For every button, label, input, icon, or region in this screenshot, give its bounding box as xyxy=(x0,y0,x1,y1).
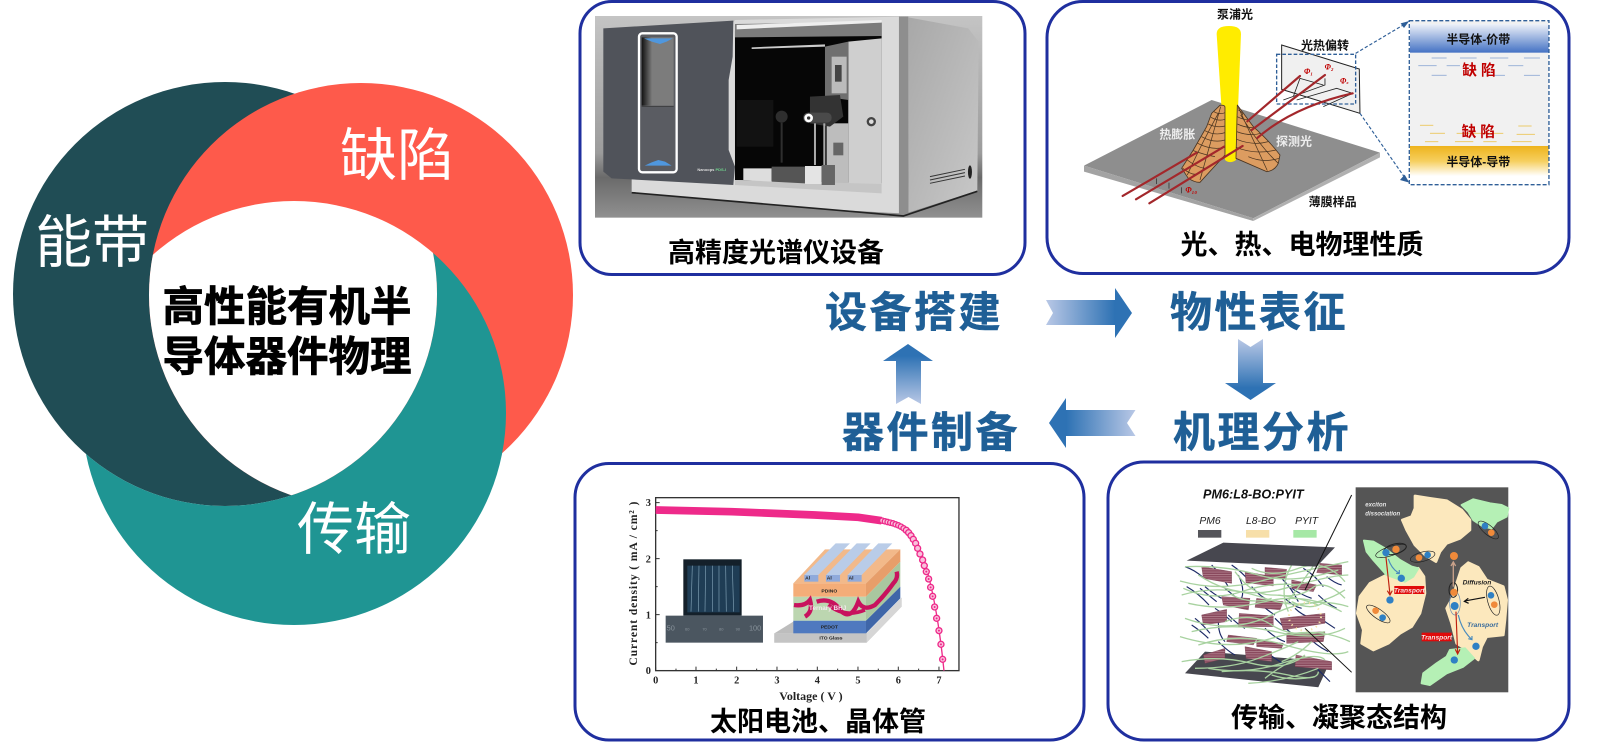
inset: device stack: PDINO xyxy=(821,589,837,595)
photothermal deflection schematic: 热膨胀 xyxy=(1159,127,1195,142)
axis tick labels xyxy=(646,498,942,687)
panel: spectrometer equipment xyxy=(580,2,1025,274)
central title: 导体器件物理 xyxy=(162,333,412,380)
arrow: down xyxy=(1225,339,1276,400)
morphology illustration: PYIT xyxy=(1295,516,1319,527)
venn diagram: three overlapping circles xyxy=(13,82,573,625)
panel: solar cells and transistors xyxy=(575,464,1084,740)
axis tick labels: 6 xyxy=(896,676,901,687)
photothermal deflection schematic: Φ₁ xyxy=(1304,67,1313,76)
photothermal deflection schematic: 泵浦光 xyxy=(1217,7,1253,22)
photothermal deflection schematic: Φ₁₀ xyxy=(1185,186,1197,195)
step: device fabrication: 器件制备 xyxy=(842,409,1020,456)
inset: device photo: 80 xyxy=(719,627,724,632)
arrow: up xyxy=(883,344,933,404)
photothermal deflection schematic: 缺 陷 xyxy=(1462,123,1495,141)
axis tick labels: 7 xyxy=(936,676,942,687)
axis tick labels: 5 xyxy=(855,676,861,687)
inset: device stack: Al xyxy=(827,576,832,582)
instrument photo xyxy=(595,16,982,218)
inset: device stack: Ternary BHJ xyxy=(809,605,847,612)
step: characterization: 物性表征 xyxy=(1170,289,1348,336)
central title: 高性能有机半 xyxy=(162,283,412,330)
morphology illustration xyxy=(1180,487,1508,692)
flow cycle xyxy=(825,288,1351,456)
morphology illustration: exciton xyxy=(1365,503,1387,509)
inset: device photo: 100 xyxy=(749,624,761,633)
photothermal deflection schematic: 薄膜样品 xyxy=(1309,194,1357,209)
axis tick labels: 0 xyxy=(653,676,658,687)
inset: device stack: Al xyxy=(805,576,811,582)
axis tick labels: 1 xyxy=(646,610,651,621)
photothermal deflection schematic: 半导体-导带 xyxy=(1446,154,1510,169)
label: energy band: 能带 xyxy=(35,211,149,275)
morphology illustration: Diffusion xyxy=(1463,580,1491,587)
J-V chart: Current density ( mA / cm² ) xyxy=(627,502,640,666)
step: equipment: 设备搭建 xyxy=(825,289,1003,336)
panel title: 传输、凝聚态结构 xyxy=(1231,703,1447,733)
axis tick labels: 1 xyxy=(693,676,699,687)
instrument photo: Nanoops PDS-I xyxy=(697,167,726,172)
panel title: 高精度光谱仪设备 xyxy=(668,238,884,268)
photothermal deflection schematic: Φₓ xyxy=(1340,76,1349,85)
photothermal deflection schematic: 半导体-价带 xyxy=(1446,31,1510,46)
inset: device stack: PEDOT xyxy=(821,625,838,631)
inset: device photo: 60 xyxy=(685,627,690,632)
central title xyxy=(162,283,412,380)
inset: device photo: 50 xyxy=(667,624,675,633)
inset: device photo: 90 xyxy=(736,627,741,632)
axis tick labels: 0 xyxy=(646,666,651,677)
inset: device stack: ITO Glass xyxy=(819,636,843,642)
axis tick labels: 4 xyxy=(815,676,820,687)
inset: device stack: Al xyxy=(848,576,854,582)
panel title: 光、热、电物理性质 xyxy=(1180,230,1424,260)
label: defects: 缺陷 xyxy=(340,124,454,188)
axis titles: Voltage ( V ) xyxy=(779,689,843,703)
photothermal deflection schematic: 缺 陷 xyxy=(1462,61,1496,79)
photothermal deflection schematic: 光热偏转 xyxy=(1301,37,1349,52)
morphology illustration: dissociation xyxy=(1365,511,1401,517)
photothermal deflection schematic xyxy=(1084,7,1549,221)
morphology illustration: L8-BO xyxy=(1246,516,1276,527)
inset: device stack xyxy=(774,543,902,643)
axis tick labels: 2 xyxy=(734,676,739,687)
arrow: left xyxy=(1049,398,1136,448)
panel: transport and morphology xyxy=(1108,462,1569,740)
inset: device photo: 70 xyxy=(702,627,708,632)
arrow: right xyxy=(1046,288,1132,338)
morphology illustration: PM6 xyxy=(1199,516,1221,527)
photothermal deflection schematic: 探测光 xyxy=(1276,133,1312,148)
label: transport: 传输 xyxy=(297,498,411,562)
J-V chart xyxy=(627,498,959,703)
morphology illustration: PM6:L8-BO:PYIT xyxy=(1203,487,1305,501)
inset: device photo xyxy=(666,559,763,643)
morphology illustration: Transport xyxy=(1421,634,1453,641)
axis tick labels: 2 xyxy=(646,554,651,565)
axis tick labels: 3 xyxy=(774,676,780,687)
morphology illustration: Transport xyxy=(1394,587,1426,594)
panel title: 太阳电池、晶体管 xyxy=(710,707,926,737)
step: mechanism analysis: 机理分析 xyxy=(1173,409,1351,456)
panel: optical thermal electrical properties xyxy=(1047,2,1569,274)
photothermal deflection schematic: Φ₂ xyxy=(1325,62,1334,71)
morphology illustration: Transport xyxy=(1467,622,1499,629)
axis tick labels: 3 xyxy=(646,498,651,509)
